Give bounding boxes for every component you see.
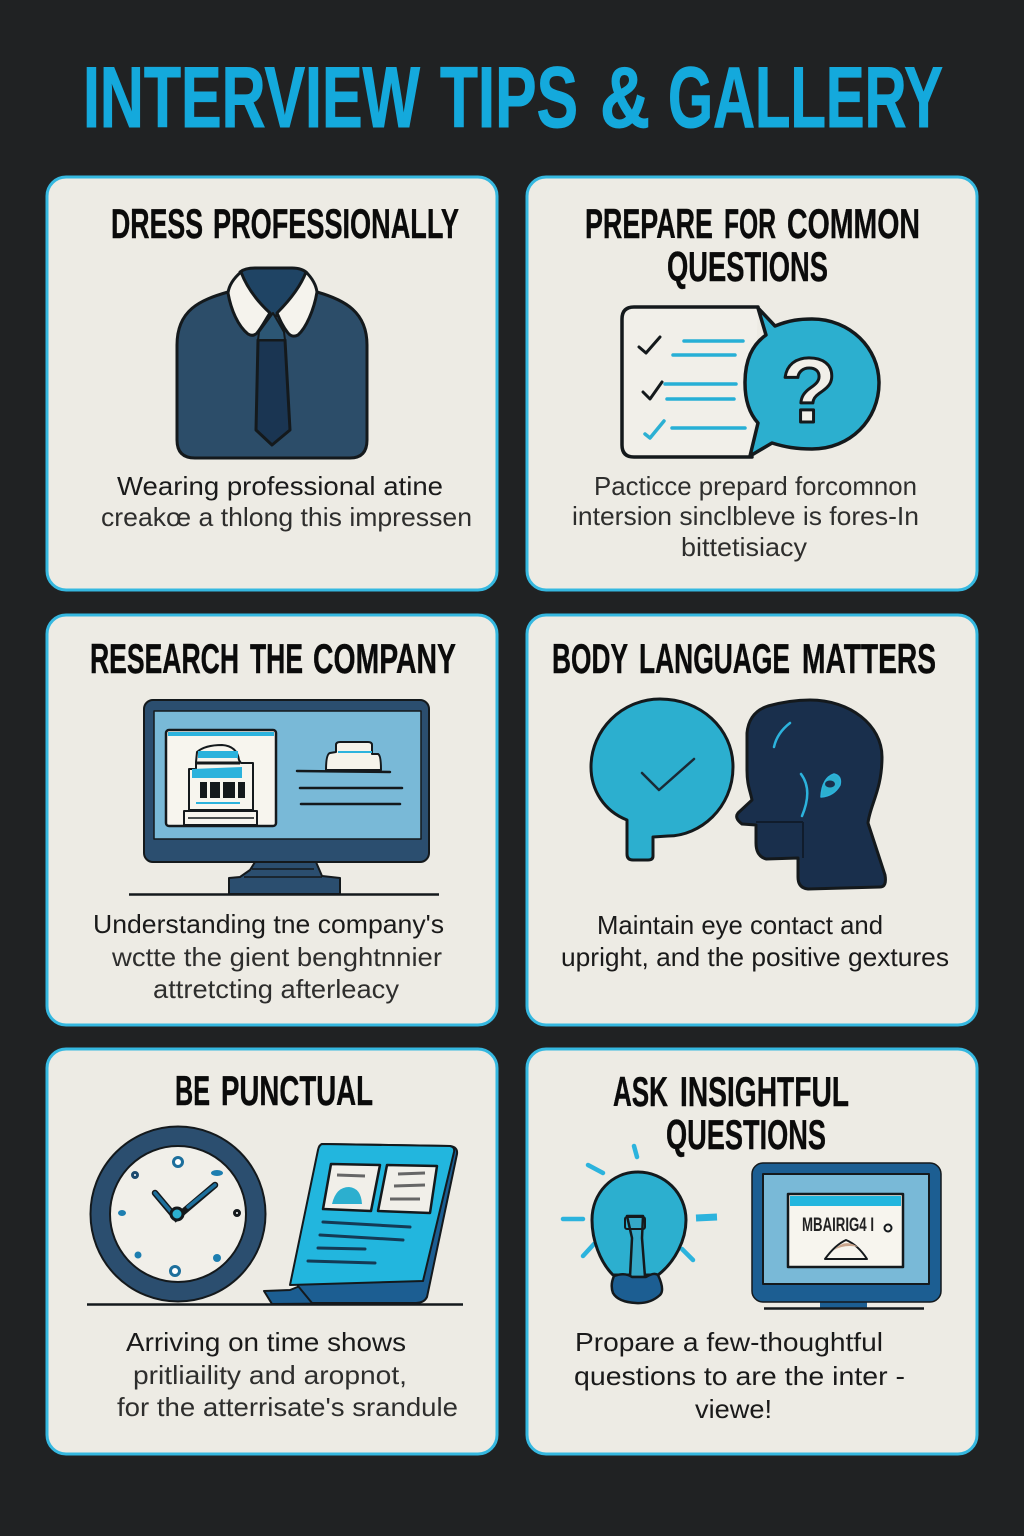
- heading: DRESS: [111, 200, 203, 247]
- heading: [90, 635, 456, 682]
- description: intersion sinclbleve is fores-In: [572, 501, 919, 531]
- description: viewe!: [695, 1394, 772, 1424]
- icon: laptop: [264, 1144, 457, 1304]
- card background: [47, 615, 497, 1025]
- heading: FOR: [724, 200, 776, 247]
- description: creakœ a thlong this impressen: [101, 502, 472, 532]
- panel: dress professionally: [47, 177, 497, 590]
- card background: [527, 615, 977, 1025]
- description: bittetisiacy: [681, 532, 807, 562]
- heading: COMPANY: [313, 635, 456, 682]
- description: for the atterrisate's srandule: [117, 1392, 458, 1422]
- heading: MATTERS: [802, 635, 936, 682]
- heading: [552, 635, 936, 682]
- heading: [613, 1068, 849, 1158]
- description: questions to are the inter -: [574, 1361, 905, 1391]
- heading: [175, 1067, 373, 1114]
- heading: QUESTIONS: [666, 1111, 826, 1158]
- panel: prepare for common questions: [527, 177, 977, 590]
- icon: checklist and question bubble: [622, 307, 879, 457]
- description: wctte the gient benghtnnier: [111, 942, 442, 972]
- description: Understanding tne company's: [93, 909, 444, 939]
- question mark: ?: [781, 340, 837, 442]
- icon: light bulb: [563, 1146, 717, 1303]
- heading: RESEARCH: [90, 635, 239, 682]
- heading: PROFESSIONALLY: [213, 200, 459, 247]
- description: Wearing professional atine: [117, 471, 443, 501]
- description: Maintain eye contact and: [597, 910, 883, 940]
- heading: COMMON: [787, 200, 920, 247]
- description: attretcting afterleacy: [153, 974, 399, 1004]
- icon: head silhouette: [737, 700, 885, 889]
- description: pritliaility and aropnot,: [133, 1360, 407, 1390]
- heading: INSIGHTFUL: [680, 1068, 849, 1115]
- title: INTERVIEW: [83, 50, 421, 146]
- description: [93, 909, 444, 1004]
- description: [561, 910, 949, 972]
- card background: [527, 177, 977, 590]
- heading: PREPARE: [585, 200, 713, 247]
- icon: speech bubble with check: [591, 699, 733, 860]
- heading: ASK: [613, 1068, 668, 1115]
- heading: LANGUAGE: [639, 635, 790, 682]
- title: TIPS: [440, 50, 578, 146]
- heading: QUESTIONS: [667, 243, 828, 290]
- description: Arriving on time shows: [126, 1327, 406, 1357]
- description: [574, 1327, 905, 1424]
- title: &: [600, 50, 650, 146]
- description: Pacticce prepard forcomnon: [594, 471, 917, 501]
- icon: computer monitor with company page: [129, 700, 439, 894]
- title: [83, 50, 943, 146]
- description: [117, 1327, 458, 1422]
- card background: [47, 177, 497, 590]
- panel: ask insightful questions: [527, 1049, 977, 1454]
- description: [101, 471, 472, 532]
- heading: [111, 200, 459, 247]
- baseline: [87, 1303, 463, 1306]
- heading: BODY: [552, 635, 628, 682]
- description: upright, and the positive gextures: [561, 942, 949, 972]
- icon: monitor with web page: MBAIRIG4 I: [802, 1215, 874, 1236]
- icon: clock: [90, 1126, 266, 1302]
- heading: BE: [175, 1067, 210, 1114]
- icon: shirt and tie: [177, 268, 367, 458]
- icon: monitor with web page: [752, 1163, 941, 1308]
- description: [572, 471, 919, 562]
- panel: research the company: [47, 615, 497, 1025]
- card background: [47, 1049, 497, 1454]
- heading: [585, 200, 920, 290]
- card background: [527, 1049, 977, 1454]
- heading: PUNCTUAL: [221, 1067, 373, 1114]
- panel: be punctual: [47, 1049, 497, 1454]
- description: Propare a few-thoughtful: [575, 1327, 883, 1357]
- panel: body language matters: [527, 615, 977, 1025]
- heading: THE: [250, 635, 303, 682]
